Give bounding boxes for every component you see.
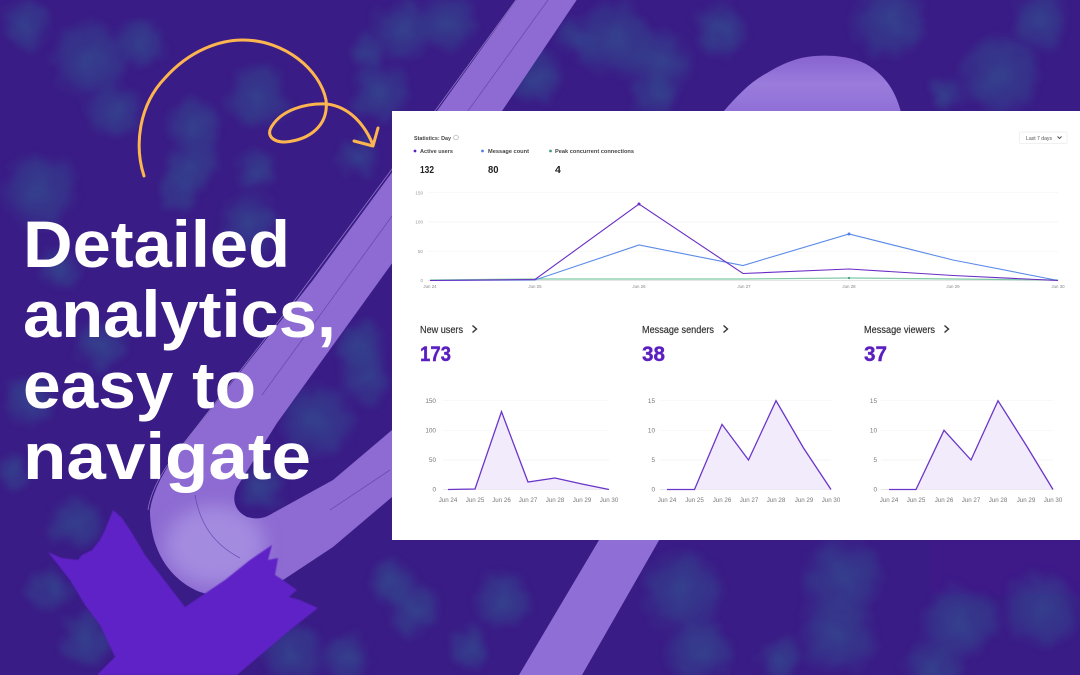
- legend: three metrics: 80: [488, 164, 499, 176]
- area chart: message viewers: Jun 25: [907, 497, 926, 504]
- area chart: message viewers: 5: [873, 457, 877, 464]
- area chart: message viewers: Jun 27: [962, 497, 981, 504]
- area chart: new users: 50: [429, 457, 436, 464]
- area chart: new users: Jun 28: [546, 497, 565, 504]
- line chart: statistics by day: Jun 26: [632, 284, 646, 289]
- panel: analytics dashboard card: [392, 111, 1080, 540]
- area chart: message senders: [648, 398, 841, 504]
- line chart: statistics by day: Jun 27: [737, 284, 751, 289]
- area chart: message senders: Jun 27: [740, 497, 759, 504]
- area chart: new users: Jun 30: [600, 497, 619, 504]
- heading: [23, 207, 336, 493]
- area chart: message senders: Jun 24: [658, 497, 677, 504]
- road: upper hairpin: [723, 56, 901, 112]
- legend: three metrics: Peak concurrent connections: [555, 149, 634, 155]
- statistics header: Statistics: Day: [414, 136, 452, 142]
- area chart: new users: 100: [425, 428, 436, 434]
- area chart: new users: [425, 398, 619, 504]
- area chart: message viewers: [870, 398, 1063, 504]
- heading: analytics,: [23, 277, 336, 351]
- legend: three metrics: [414, 149, 634, 176]
- dropdown: last 7 days: Last 7 days: [1026, 136, 1052, 142]
- heading: Detailed: [23, 207, 290, 281]
- area chart: message senders: Jun 28: [767, 497, 786, 504]
- metric: new users: 173: [420, 343, 451, 366]
- line chart: statistics by day: Jun 25: [528, 284, 542, 289]
- metric: new users: [420, 324, 619, 504]
- metric: message viewers: [864, 324, 1063, 504]
- line chart: statistics by day: Jun 30: [1051, 284, 1065, 289]
- area chart: message viewers: Jun 26: [935, 497, 954, 504]
- area chart: message viewers: 10: [870, 428, 877, 434]
- legend: three metrics: 4: [555, 164, 561, 176]
- area chart: message senders: 5: [651, 457, 655, 464]
- line chart: statistics by day: Jun 28: [842, 284, 856, 289]
- area chart: message senders: 15: [648, 398, 655, 405]
- dropdown: last 7 days: [1020, 132, 1067, 144]
- arrow: looping hand-drawn: [139, 40, 378, 176]
- heading: navigate: [23, 419, 311, 493]
- legend: three metrics: Active users: [420, 149, 453, 155]
- area chart: message viewers: Jun 24: [880, 497, 899, 504]
- brush stroke shape: [48, 510, 318, 675]
- area chart: message viewers: Jun 28: [989, 497, 1008, 504]
- line chart: statistics by day: 100: [415, 220, 423, 225]
- area chart: message viewers: Jun 29: [1017, 497, 1036, 504]
- road: main curve with hairpin: [148, 0, 578, 596]
- area chart: message senders: 10: [648, 428, 655, 434]
- road: lower straight: [519, 535, 662, 675]
- metric: message viewers: Message viewers: [864, 324, 935, 336]
- area chart: new users: 0: [432, 487, 436, 494]
- line chart: statistics by day: Jun 29: [946, 284, 960, 289]
- line chart: statistics by day: Jun 24: [423, 284, 437, 289]
- area chart: message viewers: Jun 30: [1044, 497, 1063, 504]
- area chart: new users: Jun 26: [492, 497, 511, 504]
- area chart: new users: Jun 29: [573, 497, 592, 504]
- legend: three metrics: Message count: [488, 149, 529, 155]
- legend: three metrics: 132: [420, 164, 434, 176]
- line chart: statistics by day: 150: [415, 190, 423, 196]
- area chart: message senders: Jun 26: [713, 497, 732, 504]
- metric: message senders: Message senders: [642, 324, 714, 336]
- area chart: new users: Jun 24: [439, 497, 458, 504]
- metric: message viewers: 37: [864, 343, 887, 366]
- area chart: message senders: 0: [651, 487, 655, 494]
- area chart: message viewers: 15: [870, 398, 877, 405]
- line chart: statistics by day: 0: [420, 278, 423, 283]
- metric: new users: New users: [420, 324, 463, 336]
- area chart: message senders: Jun 30: [822, 497, 841, 504]
- area chart: message viewers: 0: [873, 487, 877, 494]
- line chart: statistics by day: 50: [418, 249, 423, 254]
- area chart: new users: Jun 25: [466, 497, 485, 504]
- area chart: new users: Jun 27: [519, 497, 538, 504]
- area chart: new users: 150: [425, 398, 436, 405]
- metric: message senders: 38: [642, 343, 665, 366]
- line chart: statistics by day: [415, 190, 1065, 289]
- metric: message senders: [642, 324, 841, 504]
- area chart: message senders: Jun 29: [795, 497, 814, 504]
- heading: easy to: [23, 348, 256, 422]
- area chart: message senders: Jun 25: [685, 497, 704, 504]
